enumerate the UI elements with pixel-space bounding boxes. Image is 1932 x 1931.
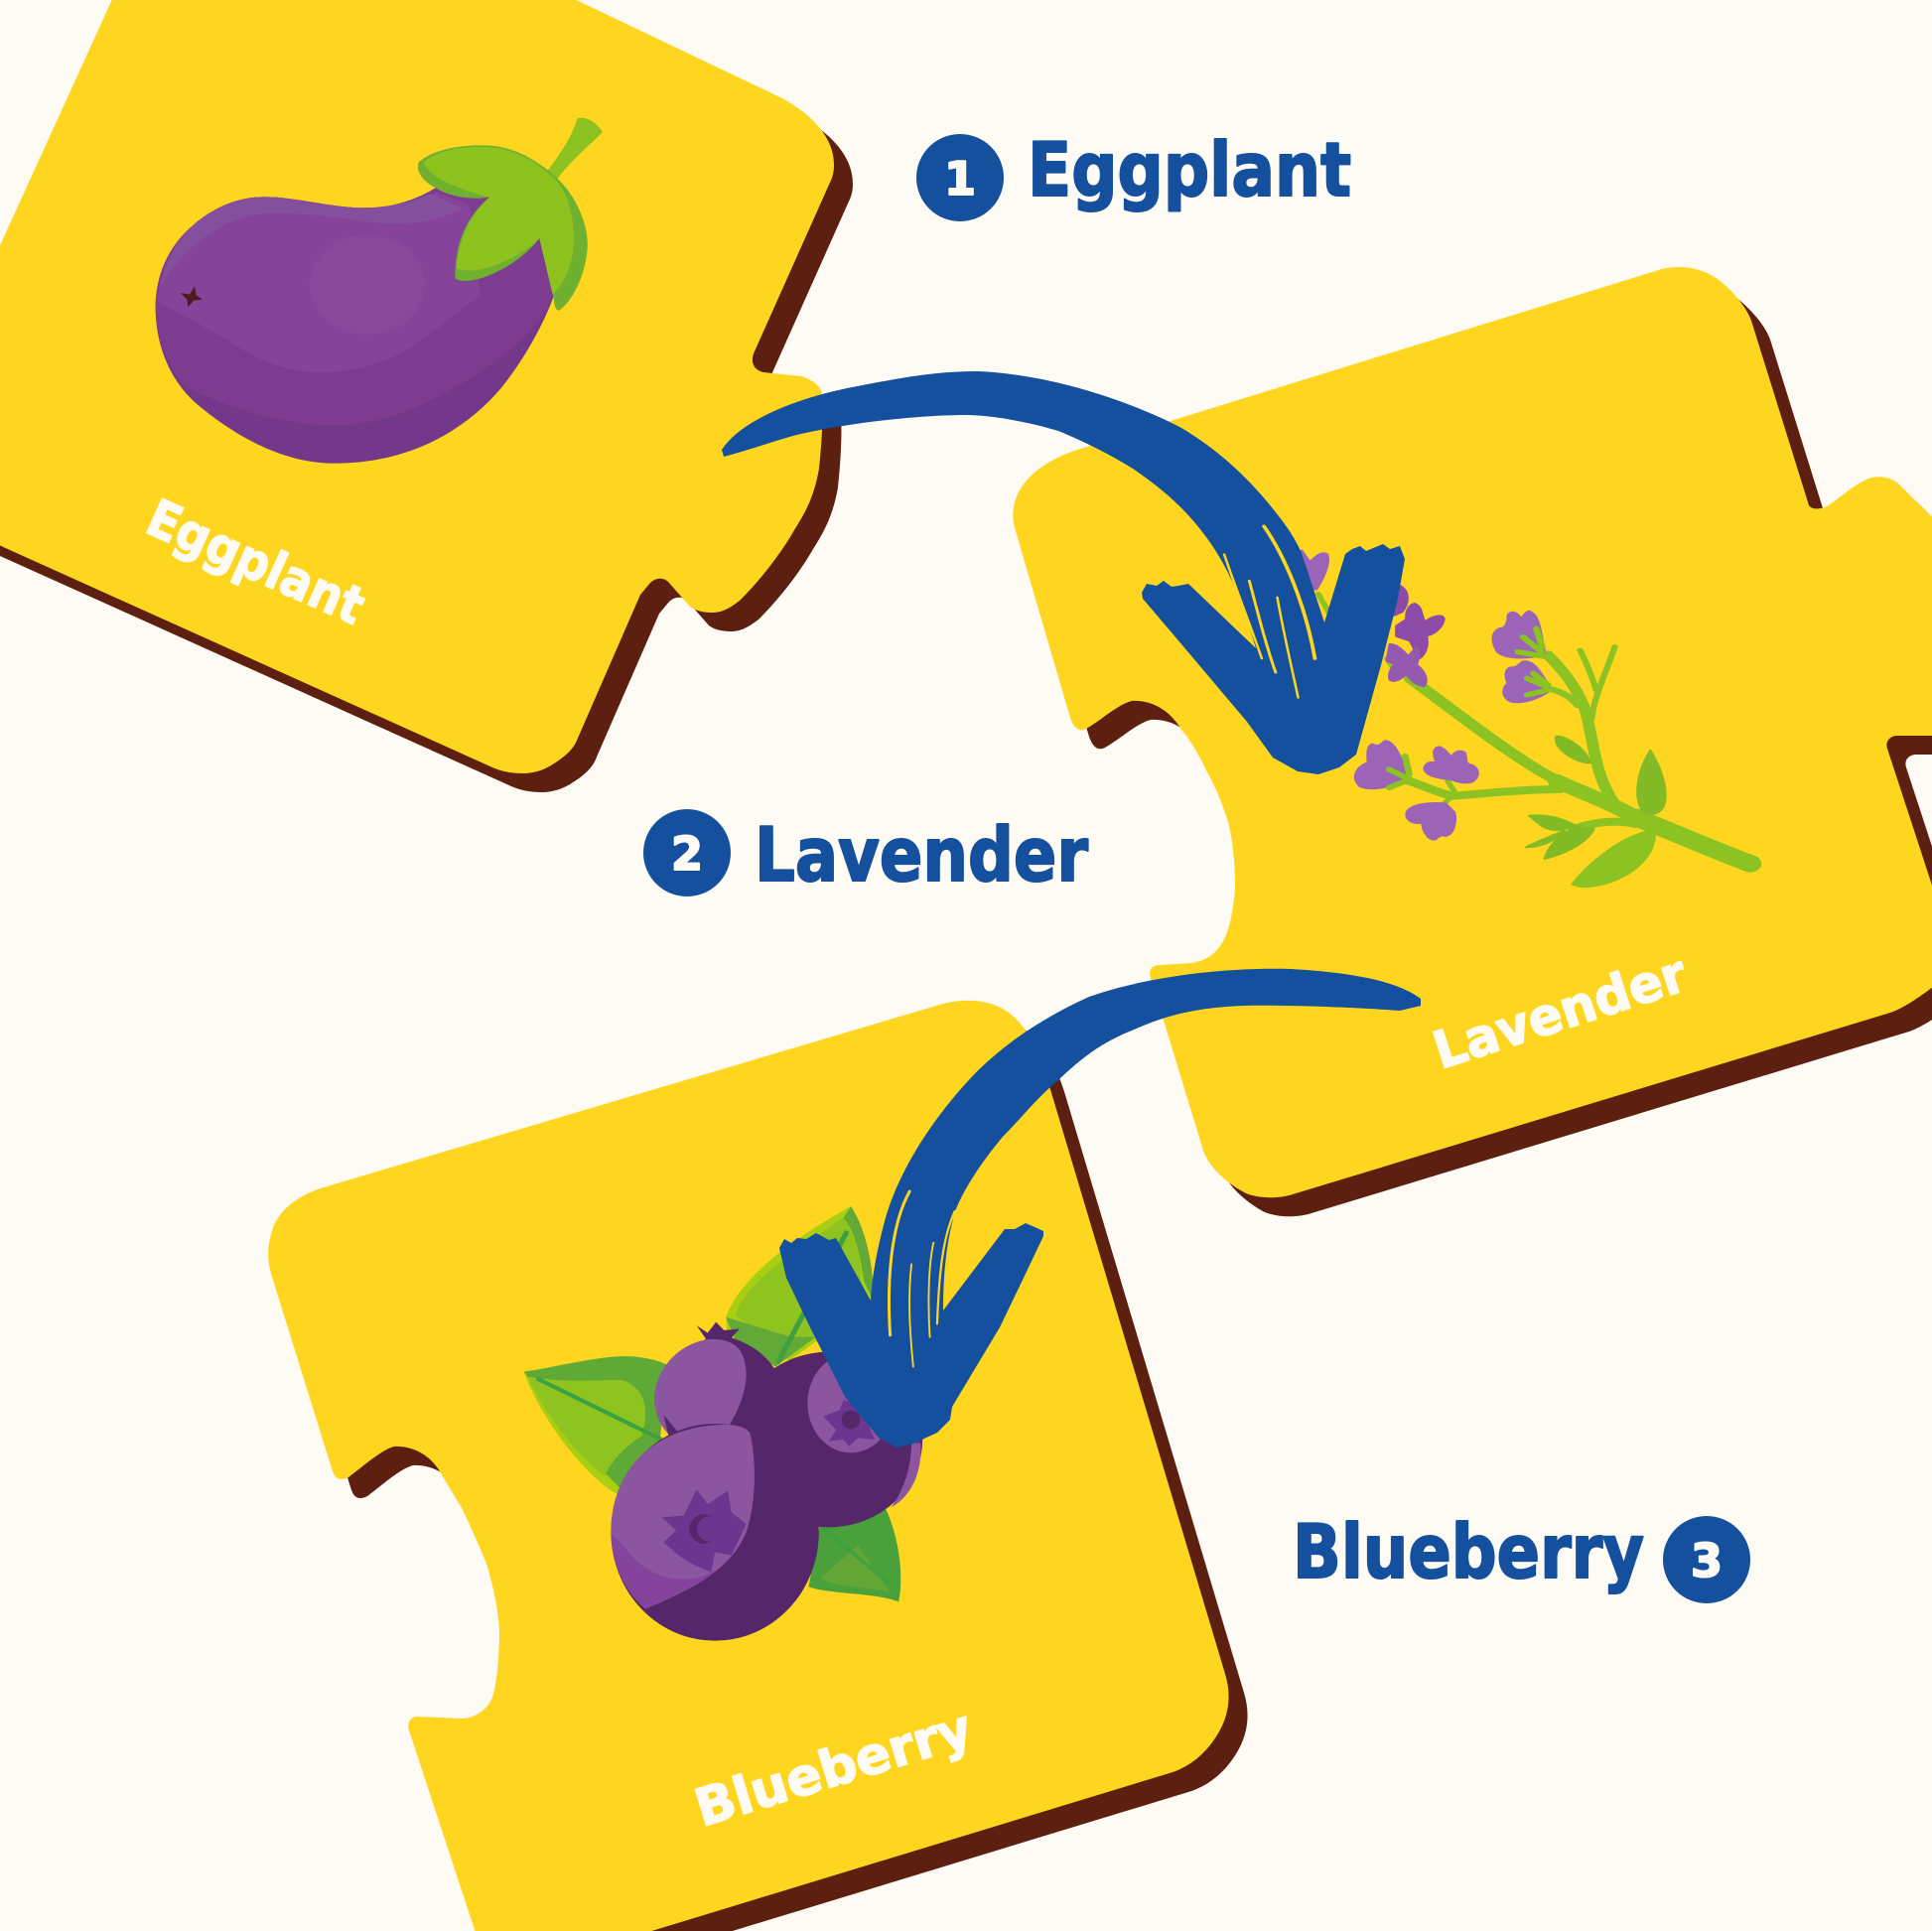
arrow: lavender to blueberry [779, 969, 1421, 1448]
heading: 2 Lavender: 2 [671, 827, 703, 881]
lower right leaf [808, 1509, 900, 1601]
sprig stems [1318, 594, 1750, 864]
icon: eggplant [156, 118, 603, 464]
arrow: eggplant to lavender [722, 371, 1405, 774]
sprig flowers [1285, 551, 1548, 839]
heading: 2 Lavender: Lavender [755, 811, 1088, 898]
card label: Eggplant: Eggplant [138, 488, 373, 637]
panel: eggplant puzzle card [0, 0, 853, 792]
front large berry [611, 1424, 819, 1641]
icon: lavender sprig [1285, 551, 1750, 887]
card label: Lavender: Lavender [1427, 944, 1695, 1081]
heading: 1 Eggplant: Eggplant [1028, 126, 1351, 213]
icon: blueberries [524, 1206, 922, 1641]
top small berry [654, 1322, 775, 1438]
heading: 1 Eggplant [916, 126, 1351, 221]
heading: 2 Lavender [643, 809, 1088, 898]
sprig leaves [1526, 737, 1665, 887]
card label: Blueberry: Blueberry [688, 1699, 979, 1839]
panel: blueberry puzzle card [268, 1001, 1248, 1931]
left leaf [524, 1356, 667, 1494]
heading: Blueberry 3: Blueberry [1293, 1508, 1644, 1595]
back right berry [735, 1352, 922, 1527]
back leaf [726, 1206, 873, 1367]
panel: lavender puzzle card [1013, 267, 1932, 1216]
heading: Blueberry 3: 3 [1691, 1534, 1723, 1587]
flower calyxes [1389, 628, 1548, 787]
heading: 1 Eggplant: 1 [944, 152, 976, 206]
